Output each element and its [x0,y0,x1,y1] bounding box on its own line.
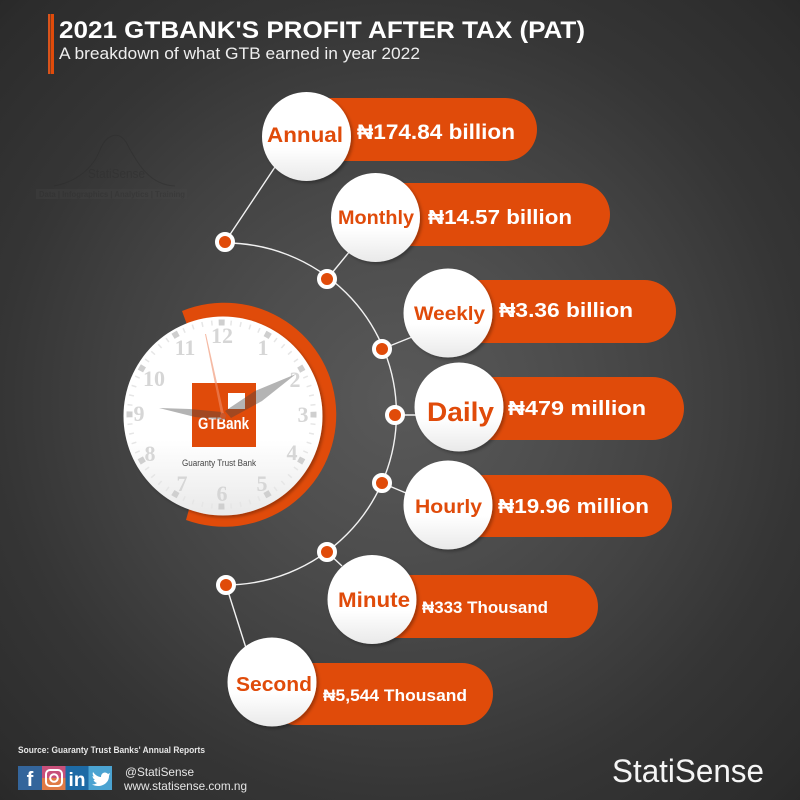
clock orange ring [182,303,336,527]
watermark logo: StatiSense [88,166,145,181]
website: www.statisense.com.ng [123,779,247,793]
row: hourly: ₦19.96 million [498,496,649,518]
clock numerals [134,323,308,506]
clock numerals: 1 [258,335,268,360]
row: annual [262,92,537,181]
row: monthly [331,173,610,262]
GTBank logo: GTBank [198,414,249,433]
clock numerals: 6 [216,481,228,506]
clock numerals: 3 [298,402,308,427]
row: second: ₦5,544 Thousand [323,687,467,705]
row: minute [328,555,598,644]
row: daily: Daily [427,397,494,427]
icon: linkedin: in [69,770,85,791]
timeline arc [225,243,396,585]
clock numerals: 8 [144,441,156,466]
clock [124,303,336,527]
clock face [124,316,322,516]
social handle: @StatiSense [125,765,194,779]
row: hourly [404,460,672,550]
title: 2021 GTBANK'S PROFIT AFTER TAX (PAT) [59,17,585,44]
clock numerals: 7 [176,471,188,496]
clock numerals: 5 [256,471,268,496]
source note: Source: Guaranty Trust Banks' Annual Reports [18,745,205,755]
clock hour marks [130,322,314,506]
subtitle: A breakdown of what GTB earned in year 2022 [59,44,420,63]
GTBank logo [192,383,256,447]
clock numerals: 11 [175,335,195,360]
clock hands [159,334,296,420]
clock numerals: 9 [134,401,144,426]
row: hourly: Hourly [415,497,482,518]
clock numerals: 10 [143,366,165,391]
row: monthly: Monthly [338,208,414,229]
icon: instagram [42,766,66,790]
social icons [18,766,112,791]
row: daily: ₦479 million [508,398,646,420]
row: monthly: ₦14.57 billion [428,207,572,229]
row: minute: ₦333 Thousand [422,599,548,617]
icon: facebook: f [27,769,34,791]
icon: twitter [88,766,112,790]
clock numerals: 2 [290,367,300,392]
row: second: Second [236,674,312,696]
bank name: Guaranty Trust Bank [182,458,256,468]
title accent bar [48,14,54,74]
row: minute: Minute [338,589,410,612]
row: second [228,638,493,726]
watermark logo [36,135,187,199]
timeline nodes [217,234,403,593]
clock numerals: 4 [286,440,298,465]
connector lines [225,167,418,648]
row: weekly: ₦3.36 billion [499,300,633,322]
row: annual: Annual [267,124,343,147]
row: weekly: Weekly [414,304,485,325]
brand wordmark: StatiSense [612,753,764,789]
row: annual: ₦174.84 billion [357,121,515,144]
clock minute ticks [130,322,314,506]
clock numerals: 12 [211,323,233,348]
row: daily [414,362,684,452]
watermark logo: Data | Infographics | Analytics | Training [39,189,185,199]
row: weekly [404,268,676,358]
